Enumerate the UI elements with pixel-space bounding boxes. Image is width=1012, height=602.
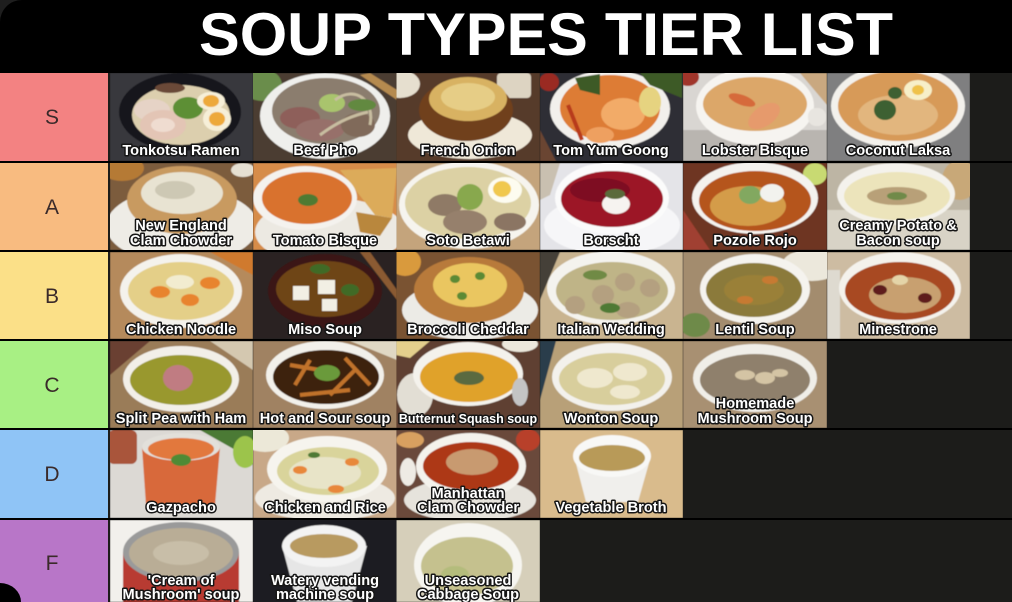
cell: Lobster Bisque: [677, 67, 827, 161]
cell: Pozole Rojo: [683, 162, 827, 250]
image: lentil soup bowl: [683, 252, 827, 339]
label: Hot and Sour soup: [260, 411, 390, 427]
cell: Coconut Laksa: [827, 64, 970, 161]
label: Clam Chowder: [130, 233, 232, 249]
image: italian wedding bowl: [540, 252, 683, 339]
label: Tom Yum Goong: [553, 143, 669, 159]
tier label F: F: [46, 552, 58, 575]
cell: New England Clam Chowder: [100, 155, 258, 264]
cell: Beef Pho: [242, 69, 397, 161]
label: New England: [135, 218, 227, 234]
label: Broccoli Cheddar: [407, 322, 529, 338]
cell: Gazpacho: [108, 430, 257, 518]
tier label B: B: [45, 285, 59, 308]
image: chicken noodle bowl: [110, 252, 253, 339]
cell: Wonton Soup: [540, 341, 683, 428]
tier row F: [0, 520, 540, 602]
cell: Cream of Mushroom soup: [110, 520, 253, 602]
tier label C: C: [44, 374, 60, 397]
cell: Chicken Noodle: [110, 252, 253, 339]
label: Watery vending: [271, 573, 379, 589]
cell: Miso Soup: [253, 252, 397, 339]
cell: Borscht: [540, 162, 683, 255]
label: Soto Betawi: [426, 233, 510, 249]
label: French Onion: [421, 143, 516, 159]
image: hot and sour bowl: [253, 341, 396, 428]
cell: Tomato Bisque: [253, 163, 405, 266]
tier label C: [0, 341, 108, 428]
image: borscht bowl: [540, 163, 683, 250]
image: split pea bowl: [110, 341, 253, 428]
label: Clam Chowder: [417, 500, 519, 516]
cell: Butternut Squash soup: [396, 336, 540, 428]
label: Mushroom Soup: [697, 411, 813, 427]
image: lobster bisque bowl: [683, 73, 827, 161]
label: Chicken and Rice: [264, 500, 386, 516]
label: Coconut Laksa: [846, 143, 951, 159]
label: Manhattan: [432, 486, 505, 502]
tier label S: S: [45, 106, 59, 129]
cell: Split Pea with Ham: [110, 341, 253, 428]
label: Pozole Rojo: [713, 233, 797, 249]
tier label S: [0, 73, 108, 161]
image: tom yum bowl: [540, 73, 683, 161]
image: manhattan chowder bowl: [396, 430, 540, 518]
tier label F: [0, 520, 108, 602]
image: gazpacho glass: [110, 430, 253, 518]
label: Lentil Soup: [715, 322, 795, 338]
cell: Lentil Soup: [680, 249, 842, 339]
cell: Unseasoned Cabbage Soup: [396, 520, 540, 602]
tier label D: [0, 430, 108, 518]
cell: Homemade Mushroom Soup: [683, 341, 827, 428]
tier row S: [0, 64, 970, 161]
image: cabbage soup bowl: [396, 520, 540, 602]
tier label B: [0, 252, 108, 339]
cell: Manhattan Clam Chowder: [396, 429, 540, 522]
image: soto betawi bowl: [396, 163, 540, 250]
label: Split Pea with Ham: [116, 411, 246, 427]
cell: Tom Yum Goong: [539, 70, 683, 161]
image: miso soup bowl: [253, 252, 396, 339]
image: french onion crock: [396, 73, 540, 161]
label: Unseasoned: [425, 573, 511, 589]
label: Lobster Bisque: [702, 143, 808, 159]
tier label A: [0, 163, 108, 250]
label: Borscht: [583, 233, 639, 249]
label: Creamy Potato &: [839, 218, 957, 234]
cell: French Onion: [380, 70, 540, 161]
cell: Creamy Potato & Bacon soup: [827, 160, 978, 250]
image: broth in a cup: [540, 430, 683, 518]
tier row A: [0, 155, 978, 266]
tier row D: [0, 424, 683, 522]
label: Tonkotsu Ramen: [122, 143, 240, 159]
image: wonton bowl: [540, 341, 683, 428]
image: creamy potato bowl: [827, 163, 970, 250]
image: tomato bisque and grilled cheese: [253, 163, 396, 250]
cell: Tonkotsu Ramen: [110, 73, 253, 161]
cell: Chicken and Rice: [241, 424, 397, 521]
image: broccoli cheddar in bread bowl: [396, 252, 540, 339]
image: pho bowl: [253, 73, 396, 161]
tier label D: D: [44, 463, 60, 486]
image: minestrone bowl: [827, 252, 970, 339]
tier row B: [0, 248, 970, 340]
cell: Italian Wedding: [540, 251, 683, 339]
label: Vegetable Broth: [555, 500, 667, 516]
image: clam chowder in bread bowl: [110, 163, 253, 250]
label: Bacon soup: [856, 233, 940, 249]
title: SOUP TYPES TIER LIST: [199, 1, 893, 68]
label: Tomato Bisque: [273, 233, 377, 249]
label: Butternut Squash soup: [399, 412, 537, 426]
image: ramen bowl: [110, 73, 253, 161]
label: Gazpacho: [146, 500, 216, 516]
image: butternut squash bowl: [396, 341, 540, 428]
label: Minestrone: [859, 322, 937, 338]
label: 'Cream of: [148, 573, 214, 589]
label: Beef Pho: [293, 143, 357, 159]
cell: Watery vending machine soup: [253, 520, 397, 602]
label: Chicken Noodle: [126, 322, 236, 338]
cell: Soto Betawi: [396, 161, 540, 250]
cell: Hot and Sour soup: [253, 341, 397, 428]
cell: Minestrone: [827, 252, 970, 339]
image: laksa bowl: [827, 73, 970, 161]
label: Wonton Soup: [564, 411, 658, 427]
cell: Vegetable Broth: [540, 430, 683, 518]
image: mushroom soup bowl: [683, 341, 827, 428]
tier label A: A: [45, 196, 59, 219]
label: Homemade: [716, 396, 794, 412]
tier row C: [0, 336, 827, 428]
image: chicken and rice bowl: [253, 430, 396, 518]
image: vending machine cup: [254, 520, 396, 602]
image: soup can: [110, 520, 253, 602]
cell: Broccoli Cheddar: [389, 248, 540, 340]
image: pozole bowl: [683, 163, 827, 250]
label: Italian Wedding: [557, 322, 665, 338]
label: Miso Soup: [288, 322, 362, 338]
